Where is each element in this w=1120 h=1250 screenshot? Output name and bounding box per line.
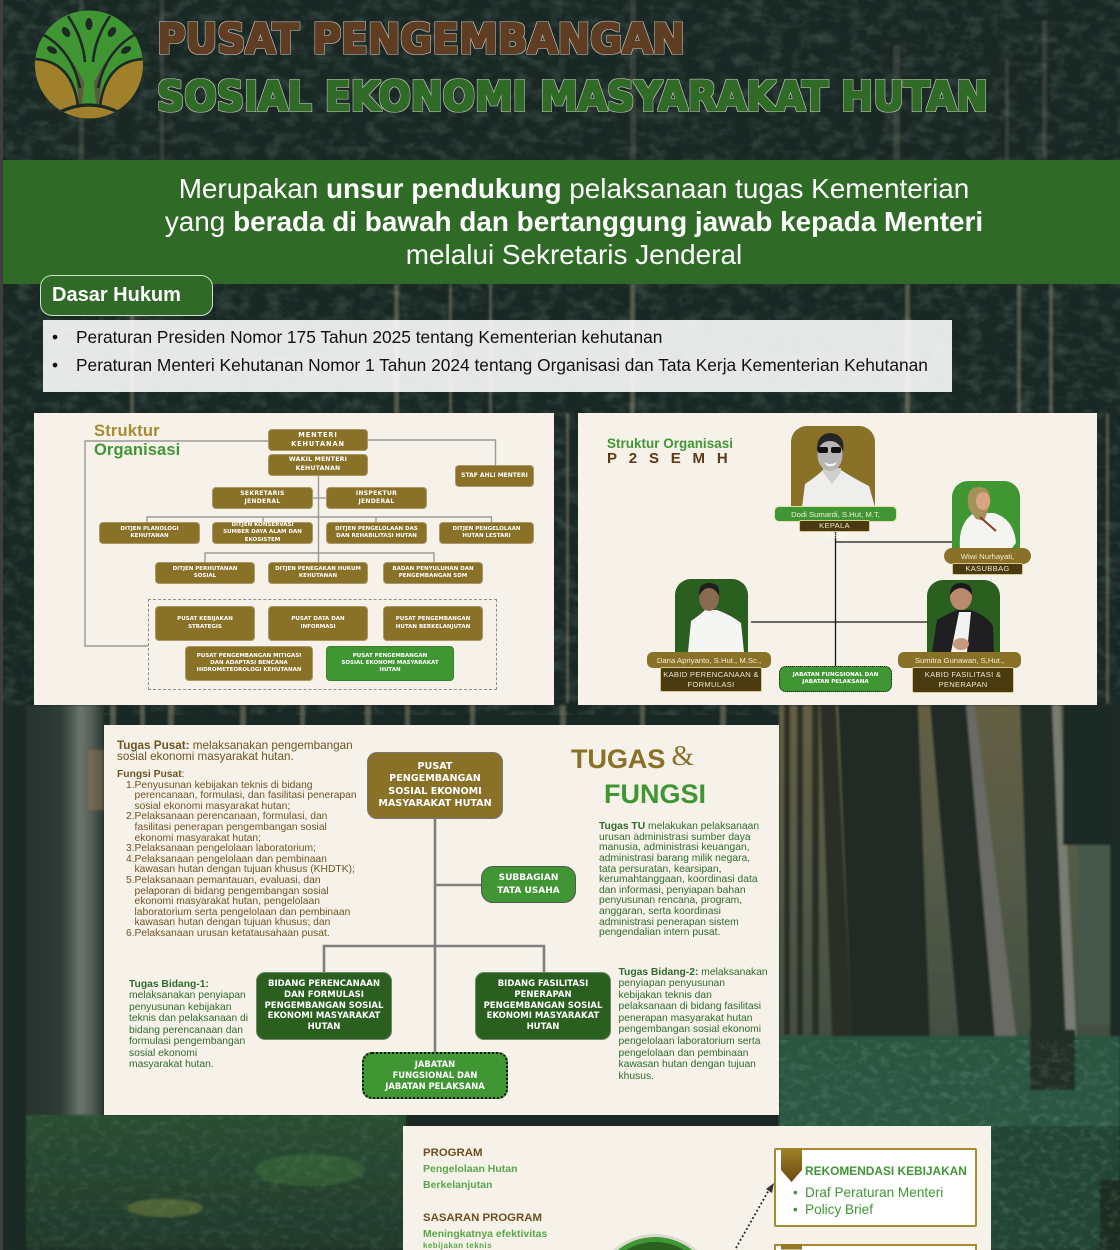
banner: mandate statement: melalui Sekretaris Jenderal: [406, 239, 742, 270]
text: fungsi pusat list: Pelaksanaan pengelolaan dan pembinaan: [134, 854, 327, 865]
text: program name: Berkelanjutan: [423, 1179, 492, 1191]
heading: TUGAS &: TUGAS &: [571, 740, 694, 774]
box: wakil menteri: WAKIL MENTERI: [289, 456, 347, 463]
box: subbagian tata usaha: SUBBAGIAN: [499, 873, 558, 883]
box: inspektur jenderal: INSPEKTUR: [356, 490, 397, 497]
photo: Dodi Sumardi: [791, 426, 875, 507]
text: fungsi pusat list: kawasan hutan dengan tujuan khusus (KHDTK);: [134, 864, 355, 875]
box: sekretaris jenderal: [212, 487, 313, 509]
heading: Organisasi: Organisasi: [94, 441, 180, 459]
name: Dodi Sumardi: Dodi Sumardi, S.Hut, M.T,: [791, 510, 880, 518]
box: subbagian tata usaha: TATA USAHA: [497, 886, 560, 896]
box: ditjen pengelolaan hutan lestari: HUTAN LESTARI: [462, 533, 511, 539]
text: tugas TU: pengendalian intern pusat.: [599, 927, 720, 938]
photo: Wiwi Nurhayati: [952, 481, 1020, 548]
box: inspektur jenderal: JENDERAL: [358, 498, 395, 505]
name: Sumitra Gunawan: [898, 652, 1021, 668]
text: tugas TU: tata persuratan, kearsipan,: [599, 864, 722, 875]
text: sasaran program: SASARAN PROGRAM: [423, 1212, 542, 1224]
card list: [793, 1185, 943, 1217]
arrow: to rekomendasi: [735, 1183, 774, 1248]
box: ditjen konservasi: EKOSISTEM: [245, 537, 280, 543]
text: fungsi pusat list: laboratorium serta pengelolaan dan pembinaan: [134, 907, 350, 918]
box: bidang perencanaan: DAN FORMULASI: [284, 990, 364, 1000]
box: staf ahli: [455, 465, 534, 487]
box: jabatan fungsional: [362, 1052, 508, 1099]
text: fungsi pusat list: Fungsi Pusat:: [117, 769, 185, 780]
hidden label under Kepala: PUSAT: [825, 534, 845, 540]
box: ditjen planologi: [99, 522, 200, 544]
text: tugas bidang 2: [618, 966, 768, 1082]
text: tugas pusat: sosial ekonomi masyarakat hutan.: [117, 750, 294, 763]
box: ditjen penegakan hukum: [268, 562, 368, 584]
text: fungsi pusat list: Pelaksanaan pengelolaan laboratorium;: [134, 843, 316, 854]
box: inspektur jenderal: [326, 487, 427, 509]
box: subbagian tata usaha: [481, 866, 576, 903]
text: tugas pusat: [117, 738, 353, 763]
box: jabatan fungsional: [779, 666, 892, 692]
box: bidang fasilitasi: EKONOMI MASYARAKAT: [487, 1011, 599, 1021]
name: Wiwi Nurhayati: [944, 548, 1031, 564]
text: tugas TU: Tugas TU melakukan pelaksanaan: [599, 821, 759, 832]
legal basis list: •: [52, 355, 58, 375]
heading: Struktur: Struktur: [94, 422, 160, 440]
text: fungsi pusat list: 5.: [126, 875, 135, 886]
text: fungsi pusat list: perencanaan, formulasi, dan fasilitasi penerapan: [134, 790, 357, 801]
box: ditjen penegakan hukum: DITJEN PENEGAKAN HUKUM: [275, 566, 361, 572]
box: menteri: KEHUTANAN: [291, 440, 345, 448]
box: sekretaris jenderal: JENDERAL: [244, 498, 281, 505]
logo: tree emblem: [35, 10, 143, 118]
role: Kabid Fasilitasi: PENERAPAN: [938, 680, 987, 689]
text: fungsi pusat list: sosial ekonomi masyarakat hutan;: [134, 801, 290, 812]
banner: mandate statement: [3, 160, 1120, 284]
box: pusat sosial ekonomi (highlighted): SOSIAL EKONOMI MASYARAKAT: [341, 660, 439, 666]
heading: FUNGSI: FUNGSI: [604, 779, 706, 809]
box: menteri: [268, 429, 368, 451]
photo: Sumitra Gunawan: [927, 580, 1000, 652]
text: program name: Pengelolaan Hutan: [423, 1163, 518, 1175]
box: bidang fasilitasi: HUTAN: [527, 1022, 559, 1032]
text: tugas bidang 2: kebijakan teknis dan: [618, 990, 712, 1001]
text: fungsi pusat list: Penyusunan kebijakan teknis di bidang: [134, 780, 313, 791]
box: jabatan fungsional: JABATAN: [415, 1059, 455, 1069]
box: pusat pengembangan: PUSAT: [418, 761, 452, 772]
box: pusat pengembangan: SOSIAL EKONOMI: [388, 786, 482, 796]
box: ditjen konservasi: DITJEN KONSERVASI: [231, 522, 294, 528]
text: tugas bidang 2: penerapan masyarakat hutan: [618, 1013, 752, 1024]
text: tugas bidang 1: teknis dan pelaksanaan di: [129, 1013, 248, 1024]
box: ditjen pengelolaan DAS: DITJEN PENGELOLAAN DAS: [335, 526, 418, 532]
photo: Dana Apriyanto: [675, 579, 748, 652]
title line 1: PUSAT PENGEMBANGAN: [157, 15, 685, 63]
text: tugas TU: anggaran, serta koordinasi: [599, 906, 721, 917]
box: jabatan fungsional: FUNGSIONAL DAN: [393, 1070, 477, 1080]
text: tugas bidang 2: khusus.: [618, 1071, 654, 1082]
box: ditjen konservasi: [212, 522, 313, 544]
text: sasaran detail: Meningkatnya efektivitas: [423, 1228, 547, 1240]
box: pusat hutan berkelanjutan: HUTAN BERKELANJUTAN: [396, 624, 470, 630]
box: bidang perencanaan: PENGEMBANGAN SOSIAL: [265, 1001, 383, 1011]
banner: mandate statement: yang berada di bawah dan bertanggung jawab kepada Menteri: [165, 206, 983, 237]
box: bidang perencanaan: [256, 972, 392, 1040]
box: ditjen pengelolaan hutan lestari: [439, 522, 534, 544]
role: Kabid Perencanaan: [660, 667, 762, 692]
box: bidang fasilitasi: BIDANG FASILITASI: [498, 979, 588, 989]
text: tugas TU: manusia, administrasi keuangan,: [599, 842, 750, 853]
box: badan penyuluhan: [383, 562, 483, 584]
box: ditjen planologi: KEHUTANAN: [130, 533, 169, 539]
box: sekretaris jenderal: SEKRETARIS: [240, 490, 285, 497]
role: Kasubbag: [952, 563, 1023, 575]
role: Kabid Fasilitasi: KABID FASILITASI &: [925, 670, 1001, 679]
box: pusat hutan berkelanjutan: PUSAT PENGEMBANGAN: [396, 616, 470, 622]
box: bidang fasilitasi: [475, 972, 611, 1040]
text: tugas bidang 2: penyiapan penyusunan: [618, 978, 725, 989]
text: tugas bidang 1: sosial ekonomi: [129, 1048, 197, 1058]
text: tugas bidang 2: pengelolaan dan pembinaan: [618, 1048, 748, 1059]
box: pusat mitigasi: [185, 646, 313, 681]
text: tugas bidang 2: Tugas Bidang-2: melaksanakan: [618, 966, 768, 978]
text: tugas TU: kerumahtanggaan, koordinasi data: [599, 874, 758, 885]
tab: Dasar Hukum: [40, 275, 213, 316]
text: tugas TU: [599, 821, 759, 938]
text: fungsi pusat list: Pelaksanaan perencanaan, formulasi, dan: [134, 811, 327, 822]
title: [157, 15, 988, 120]
text: tugas bidang 1: Tugas Bidang-1:: [129, 978, 209, 990]
text: tugas bidang 1: [129, 978, 248, 1070]
card list: Draf Peraturan Menteri: [805, 1185, 943, 1200]
text: fungsi pusat list: 3.: [126, 843, 135, 854]
box: ditjen penegakan hukum: KEHUTANAN: [299, 573, 337, 579]
text: tugas bidang 2: pelaksanaan di bidang fasilitasi: [618, 1001, 761, 1012]
box: jabatan fungsional: JABATAN FUNGSIONAL DAN: [793, 672, 878, 678]
box: pusat data dan informasi: [268, 606, 368, 641]
box: pusat data dan informasi: INFORMASI: [300, 624, 336, 630]
box: pusat pengembangan: [367, 752, 503, 819]
text: fungsi pusat list: [117, 769, 357, 939]
role: Kabid Perencanaan: KABID PERENCANAAN &: [663, 670, 759, 678]
text: tugas TU: administrasi penerapan sistem: [599, 917, 739, 928]
role: Kabid Fasilitasi: [912, 667, 1014, 693]
box: pusat kebijakan strategis: [155, 606, 255, 641]
left trunk: [26, 705, 104, 1120]
name: Sumitra Gunawan: Sumitra Gunawan, S,Hut.,: [915, 656, 1004, 664]
panel: program and outputs: [403, 1126, 991, 1250]
box: ditjen konservasi: SUMBER DAYA ALAM DAN: [223, 529, 302, 535]
box: pusat pengembangan: MASYARAKAT HUTAN: [378, 798, 492, 809]
name: Wiwi Nurhayati: Wiwi Nurhayati,: [961, 552, 1014, 560]
connector lines: [751, 532, 952, 666]
box: pusat kebijakan strategis: STRATEGIS: [188, 624, 222, 630]
box: bidang perencanaan: EKONOMI MASYARAKAT: [268, 1011, 380, 1021]
text: tugas bidang 1: masyarakat hutan.: [129, 1059, 214, 1070]
text: tugas bidang 1: penyusunan kebijakan: [129, 1002, 231, 1012]
box: bidang fasilitasi: PENGEMBANGAN SOSIAL: [484, 1001, 602, 1011]
card list: •: [793, 1202, 798, 1217]
heading: Struktur Organisasi: Struktur Organisasi: [607, 436, 733, 451]
ground: [26, 1030, 1120, 1250]
box: pusat mitigasi: PUSAT PENGEMBANGAN MITIGASI: [197, 653, 301, 659]
banner: mandate statement: Merupakan unsur pendukung pelaksanaan tugas Kementerian: [179, 173, 969, 204]
text: fungsi pusat list: fasilitasi penerapan pengembangan sosial: [134, 822, 327, 833]
connector lines: [322, 819, 546, 1052]
icon: central circle (cropped by frame): [613, 1234, 697, 1250]
icon: bookmark: [781, 1148, 802, 1182]
text: program name: [423, 1163, 789, 1244]
box: ditjen perhutanan sosial: SOSIAL: [194, 573, 216, 579]
box: jabatan fungsional: JABATAN PELAKSANA: [385, 1081, 485, 1091]
box: menteri: MENTERI: [298, 431, 338, 439]
text: fungsi pusat list: 6.: [126, 928, 135, 939]
legal basis list: [43, 320, 952, 392]
text: tugas bidang 1: melaksanakan penyiapan: [129, 990, 246, 1001]
card list: Policy Brief: [805, 1202, 873, 1217]
card list: •: [793, 1185, 798, 1200]
text: tugas TU: penyusunan rencana, program,: [599, 895, 742, 906]
box: pusat data dan informasi: PUSAT DATA DAN: [291, 616, 345, 622]
role: Kabid Perencanaan: FORMULASI: [687, 680, 734, 688]
text: fungsi pusat list: 1.: [126, 780, 135, 791]
text: fungsi pusat list: ekonomi masyarakat hutan;: [134, 833, 261, 844]
box: ditjen perhutanan sosial: [155, 562, 255, 584]
panel: tugas dan fungsi: [104, 725, 779, 1115]
text: tugas TU: urusan administrasi sumber daya: [599, 832, 751, 843]
legal basis list: Peraturan Presiden Nomor 175 Tahun 2025 tentang Kementerian kehutanan: [76, 327, 662, 347]
role: Kepala: [799, 520, 870, 532]
box: ditjen pengelolaan DAS: [326, 522, 427, 544]
right forest: [779, 705, 1120, 1045]
box: ditjen pengelolaan hutan lestari: DITJEN PENGELOLAAN: [453, 526, 520, 532]
box: jabatan fungsional: JABATAN PELAKSANA: [802, 679, 869, 685]
box: pusat hutan berkelanjutan: [383, 606, 483, 641]
name: Dana Apriyanto: Dana Apriyanto, S.Hut., M.Sc.,: [657, 656, 761, 664]
text: fungsi pusat list: ekonomi masyarakat hutan, pengelolaan: [134, 896, 320, 907]
box: staf ahli: STAF AHLI MENTERI: [461, 472, 528, 479]
icon: bookmark: [781, 1244, 802, 1250]
box: wakil menteri: KEHUTANAN: [296, 465, 340, 472]
box: pusat sosial ekonomi (highlighted): [326, 646, 454, 681]
text: tugas TU: administrasi barang milik negara,: [599, 853, 750, 864]
box: badan penyuluhan: PENGEMBANGAN SDM: [399, 573, 467, 579]
card: rekomendasi kebijakan: [774, 1148, 977, 1227]
box: pusat sosial ekonomi (highlighted): PUSAT PENGEMBANGAN: [353, 653, 427, 659]
box: bidang fasilitasi: PENERAPAN: [514, 990, 572, 1000]
tab: Dasar Hukum: Dasar Hukum: [52, 284, 181, 306]
text: fungsi pusat list: pelaporan di bidang pengembangan sosial: [134, 886, 329, 897]
box: wakil menteri: [268, 454, 368, 476]
dashed group frame: [148, 599, 497, 690]
text: tugas bidang 2: pengembangan sosial ekonomi: [618, 1024, 761, 1035]
box: pusat pengembangan: PENGEMBANGAN: [389, 773, 481, 784]
card title: REKOMENDASI KEBIJAKAN: [805, 1164, 967, 1178]
box: pusat sosial ekonomi (highlighted): HUTAN: [379, 667, 401, 673]
box: pusat kebijakan strategis: PUSAT KEBIJAKAN: [177, 616, 233, 622]
legal basis list: •: [52, 327, 58, 347]
role: Kepala: KEPALA: [819, 521, 850, 530]
text: tugas bidang 2: kawasan hutan dengan tujuan: [618, 1059, 756, 1070]
card: second output (cropped by frame): [774, 1244, 977, 1250]
panel: P2SEMH structure: [578, 413, 1097, 705]
connector lines: [84, 439, 496, 647]
box: pusat mitigasi: DAN ADAPTASI BENCANA: [210, 660, 288, 666]
hidden label under Kasubbag: TU: [985, 578, 993, 584]
role: Kasubbag: KASUBBAG: [965, 564, 1010, 573]
box: badan penyuluhan: BADAN PENYULUHAN DAN: [392, 566, 474, 572]
box: ditjen pengelolaan DAS: DAN REHABILITASI HUTAN: [336, 533, 417, 539]
text: sasaran detail continued: kebijakan teknis: [423, 1241, 492, 1250]
text: fungsi pusat list: Pelaksanaan urusan ketatausahaan pusat.: [134, 928, 330, 939]
text: fungsi pusat list: Pelaksanaan pemantauan, evaluasi, dan: [134, 875, 321, 886]
text: tugas pusat: Tugas Pusat: melaksanakan pengembangan: [117, 738, 353, 752]
text: tugas bidang 2: pengelolaan laboratorium serta: [618, 1036, 760, 1047]
box: ditjen planologi: DITJEN PLANOLOGI: [120, 526, 179, 532]
heading: P2SEMH: P2SEMH: [607, 450, 740, 467]
text: fungsi pusat list: 4.: [126, 854, 135, 865]
text: fungsi pusat list: 2.: [126, 811, 135, 822]
box: bidang perencanaan: BIDANG PERENCANAAN: [268, 979, 380, 989]
text: tugas bidang 1: formulasi pengembangan: [129, 1036, 245, 1047]
text: fungsi pusat list: kawasan hutan dengan tujuan khusus; dan: [134, 917, 330, 928]
name: Dana Apriyanto: [647, 652, 771, 668]
box: bidang perencanaan: HUTAN: [308, 1022, 340, 1032]
legal basis list: Peraturan Menteri Kehutanan Nomor 1 Tahun 2024 tentang Organisasi dan Tata Kerja Kementerian Kehutanan: [76, 355, 928, 375]
box: ditjen perhutanan sosial: DITJEN PERHUTANAN: [173, 566, 237, 572]
text: tugas TU: dan informasi, penyiapan bahan: [599, 885, 746, 896]
panel: ministry organisation chart: [34, 413, 554, 705]
name: Dodi Sumardi: [774, 506, 897, 522]
text: tugas bidang 1: bidang perencanaan dan: [129, 1024, 243, 1036]
text: program: PROGRAM: [423, 1147, 482, 1159]
box: pusat mitigasi: HIDROMETEOROLOGI KEHUTANAN: [196, 667, 302, 673]
